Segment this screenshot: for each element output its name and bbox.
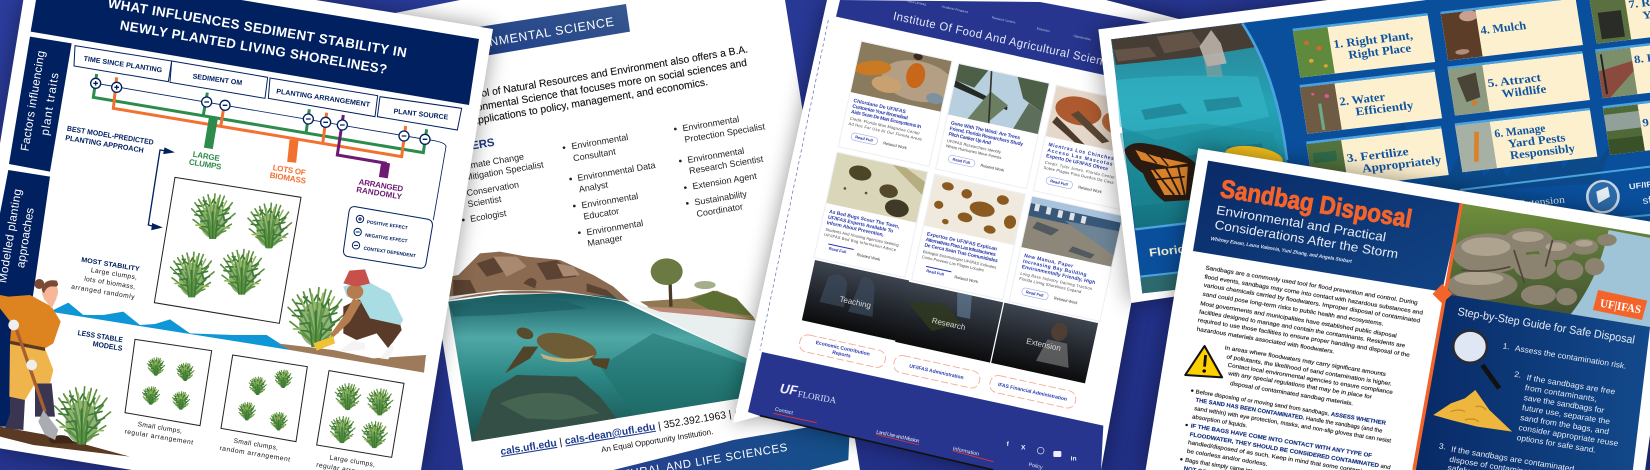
poster footer rules <box>1460 167 1650 220</box>
bullet list: be colorless and/or odorless. <box>1186 449 1268 468</box>
bullet list: absorption of liquids. <box>1192 414 1248 429</box>
news card 1: Chlordane De UF/IFAS <box>853 98 907 115</box>
news card 5: Related Work <box>954 274 979 284</box>
side panel: modelled planting approaches: approaches <box>14 207 37 269</box>
caption: small clumps random: random arrangement <box>219 445 291 464</box>
tile: research: Research <box>931 316 966 332</box>
news card 4: Students And Housing Agencies Seeking <box>825 227 899 247</box>
intro paragraph: in Environmental Science that focuses more on social sciences and <box>442 58 748 120</box>
news card 6: New Manua, Paper <box>1024 253 1074 270</box>
intro paragraph: applications to policy, management, and economics. <box>472 77 709 127</box>
news card 1 <box>836 40 960 168</box>
news card 5 <box>911 174 1026 300</box>
news card 1: Aids Scan De Man Ecosystems In <box>850 109 922 130</box>
careers list: Environmental <box>586 218 644 237</box>
steps list: sand from the bags, and <box>1520 413 1610 436</box>
footer band: college name <box>488 420 850 470</box>
news card 5: De Cerca Sean Tras Comunidades <box>924 242 999 264</box>
caption: large clumps regular: Large clumps, <box>329 454 376 469</box>
tile 6: manage yard pests responsibly: Responsibly <box>1509 142 1576 162</box>
sandbag header: Environmental and Practical <box>1215 202 1387 244</box>
intro text: various chemicals carried by floodwaters. Improper disposal of contaminated <box>1203 283 1421 324</box>
news card 3: Related Work <box>1078 184 1102 194</box>
button: IFAS financial administration: IFAS Financial Administration <box>997 382 1067 403</box>
website footer: X <box>1021 444 1026 451</box>
tile 9: protect the waterfront <box>1602 100 1650 155</box>
trait label: lots of biomass <box>269 163 307 186</box>
news card 6: Read Full <box>1025 289 1044 298</box>
steps list: consider appropriate reuse <box>1518 423 1619 448</box>
careers list: Protection Specialist <box>684 121 766 145</box>
intro text: required to use those facilities to ensure proper handling and disposal of the <box>1197 318 1410 359</box>
bullet list <box>1180 389 1392 470</box>
illustration: monarch butterfly <box>1124 143 1196 202</box>
website header: Research Centers <box>991 15 1016 25</box>
trait label: lots of biomass: BIOMASS <box>269 171 307 186</box>
tile 6: manage yard pests responsibly <box>1455 108 1597 172</box>
orange divider <box>1414 203 1461 470</box>
text: most stability: Large clumps, <box>90 267 138 282</box>
warning text <box>1224 345 1393 407</box>
news card 2: Where Hurricanes Move Forests <box>945 143 1002 160</box>
caption bar: Florida-Friendly <box>1135 208 1333 293</box>
title banner: NEWLY PLANTED LIVING SHORELINES? <box>119 17 388 77</box>
side panel: factors influencing plant traits <box>9 37 72 172</box>
factor labels <box>83 56 449 122</box>
seal <box>1587 181 1618 212</box>
tile: teaching <box>802 260 909 341</box>
careers list: Conservation <box>466 179 520 198</box>
news card 3: Read Full <box>1050 178 1068 187</box>
text: most stability <box>71 257 141 301</box>
careers list <box>459 114 766 248</box>
tile 4: mulch: 4. Mulch <box>1480 19 1527 37</box>
intro paragraph: The School of Natural Resources and Environment also offers a B.A. <box>437 44 749 107</box>
legend <box>344 207 432 268</box>
text: less stable models: MODELS <box>92 339 123 353</box>
tile 4: mulch <box>1440 0 1583 61</box>
careers list: Manager <box>587 233 623 248</box>
button: IFAS financial administration <box>988 374 1077 410</box>
tile 7: recycle yard waste <box>1589 0 1650 44</box>
tile 5: attract wildlife <box>1447 51 1590 116</box>
trait label: arranged randomly <box>356 177 404 202</box>
steps list: Assess the contamination risk. <box>1514 344 1627 371</box>
website footer: FLORIDA <box>797 389 838 405</box>
website footer: f <box>1007 441 1010 448</box>
careers list: Mitigation Specialist <box>464 159 545 182</box>
tile 5: attract wildlife: 5. Attract <box>1487 71 1543 90</box>
side panel: factors influencing plant traits: plant traits <box>38 72 62 136</box>
sandbag header: Considerations After the Storm <box>1213 217 1399 261</box>
news card 5: Read Full <box>926 268 945 277</box>
steps list: 1. <box>1502 342 1510 351</box>
tile 6: manage yard pests responsibly: 6. Manage <box>1493 122 1547 140</box>
logo: UF/IFAS <box>1593 290 1647 320</box>
intro text: facilities designed to manage and contain the contaminants. Residents are <box>1199 309 1406 349</box>
panel: step-by-step guide <box>1416 294 1650 470</box>
news card 5: Biologist Entomologist UF/IFAS Indicates <box>923 249 997 270</box>
careers heading: CAREERS <box>439 137 496 158</box>
news card 2: UF/IFAS Researchers Identify <box>947 138 1001 155</box>
news card 1: Related Work <box>883 140 907 150</box>
illustration: man planting shoreline grass <box>288 269 403 359</box>
text: most stability: MOST STABILITY <box>81 257 141 273</box>
section tab: environmental science: ENVIRONMENTAL SCIENCE <box>437 14 615 58</box>
news card 5: Como Prevenir Las Plagas Locales <box>921 254 984 273</box>
careers list: Sustainability <box>694 189 748 207</box>
tile 1: right plant right place: 1. Right Plant, <box>1332 29 1414 51</box>
photo: sea turtle and island <box>448 252 756 442</box>
careers list: Environmental <box>682 114 740 133</box>
factor labels: PLANTING ARRANGEMENT <box>276 88 371 109</box>
page: environmental science flyer <box>390 0 860 470</box>
news card 3: Experto De UF/IFAS Ofrece <box>1045 153 1109 172</box>
factor labels: PLANT SOURCE <box>393 108 449 122</box>
bullet list: Before disposing of or moving sand from sandbags, ASSESS WHETHER <box>1195 389 1387 427</box>
careers list: Analyst <box>578 179 609 194</box>
website footer: Contact <box>774 407 794 417</box>
news card 4: UF/IFAS Bed Bug Information Advice <box>824 232 897 252</box>
steps list: from contaminants, <box>1524 383 1598 404</box>
page: IFAS website screenshot <box>733 0 1190 470</box>
steps list: save the sandbags for <box>1523 393 1605 415</box>
news card 2: Related Work <box>980 163 1005 173</box>
news card 3: Acceso Las Mascotas <box>1047 148 1113 168</box>
news card 6: Related Work <box>1053 295 1078 305</box>
bullet list: IF THE BAGS HAVE COME INTO CONTACT WITH ANY TYPE OF <box>1190 423 1373 459</box>
caption: small clumps regular: regular arrangement <box>124 428 194 447</box>
tile 2: water efficiently: 2. Water <box>1338 90 1386 108</box>
caption: small clumps random: Small clumps, <box>233 438 279 452</box>
steps list: future use, separate the <box>1521 403 1611 426</box>
tile 2: water efficiently <box>1299 69 1442 134</box>
news card 4: UF/IFAS Experts Available To <box>827 215 894 235</box>
title banner <box>31 0 479 105</box>
legend: POSITIVE EFFECT <box>367 219 408 230</box>
careers list: Scientist <box>467 194 502 209</box>
caption bar: Florida-Friendly: Florida-Friendly Landscaping <box>1148 226 1333 259</box>
illustration: woman digging with shovel <box>0 279 130 457</box>
logo: UF/IFAS: UF|IFAS <box>1599 296 1643 316</box>
text: less stable models: LESS STABLE <box>77 328 124 344</box>
steps list: 2. <box>1514 370 1522 380</box>
panel: small clumps random <box>221 355 307 442</box>
caption: small clumps regular: Small clumps, <box>137 421 183 435</box>
news card 2: Gone With The Wind: Are Trees <box>950 120 1021 141</box>
tile: research <box>895 282 1003 363</box>
panel: most stable planting <box>154 177 301 323</box>
news card 1: Customize Your Bromeliad <box>852 104 908 121</box>
trait label: large clumps: LARGE <box>192 150 221 163</box>
factor labels: SEDIMENT OM <box>192 73 243 87</box>
news card 6: Florida Living Shorelines Expand <box>1019 276 1082 294</box>
tile: extension <box>991 303 1098 383</box>
arrow: best model bracket <box>148 148 173 229</box>
tile 1: right plant right place <box>1292 13 1435 78</box>
website header: Academic Programs <box>941 4 969 14</box>
news card 4: Inform About Prevention, <box>826 220 885 239</box>
careers list: Ecologist <box>469 208 507 224</box>
careers list: Environmental <box>687 146 745 165</box>
website footer: UF <box>779 381 799 398</box>
news card 3: Sobre Plagas Para Dueños De Casa <box>1043 165 1115 185</box>
tile 3: fertilize appropriately <box>1306 126 1449 181</box>
trait label: arranged randomly: RANDOMLY <box>356 185 403 202</box>
tile: teaching: Teaching <box>839 295 872 310</box>
poster footer contact <box>1628 178 1650 207</box>
icon: warning triangle <box>1185 346 1222 377</box>
page: sediment stability infographic <box>0 0 493 470</box>
silhouetted plants <box>1390 123 1614 193</box>
website header: Opportunities <box>1073 34 1092 42</box>
steps list: 3. <box>1438 442 1447 451</box>
careers list: Consultant <box>572 146 617 163</box>
intro text <box>1196 265 1423 359</box>
warning text: of pollutants, the likelihood of sand contamination is higher. <box>1226 354 1393 388</box>
news card 1: Ad Hoc For Use At Our Florida Areas <box>848 121 922 142</box>
steps list: If the sandbags are free <box>1526 373 1616 396</box>
factor header boxes <box>74 46 462 130</box>
blue poster field <box>1111 0 1650 293</box>
trait label: large clumps <box>188 150 223 172</box>
sandbag header: Whitney Eavan, Laura Valencia, Yuni Zhang, and Angela Stobart <box>1210 236 1353 265</box>
intro text: hazardous materials associated with floodwaters. <box>1196 327 1335 355</box>
trait label: large clumps: CLUMPS <box>188 157 223 172</box>
careers list: Environmental <box>571 132 629 151</box>
news card 1: Credit: Florida Man Magazine Center <box>849 116 921 136</box>
tile 5: attract wildlife: Wildlife <box>1501 82 1548 100</box>
warning text: Contact local environmental agencies to ensure compliance <box>1227 363 1393 396</box>
button: UF/IFAS administration <box>892 354 981 390</box>
best model heading: BEST MODEL-PREDICTED <box>66 124 154 147</box>
bullet list: THE SAND HAS BEEN CONTAMINATED. Handle the sandbags (and the <box>1195 398 1383 435</box>
intro text: Most governments and municipalities have established public disposal <box>1200 301 1397 339</box>
news card 6: Increasing Bay Building <box>1022 259 1087 278</box>
text: most stability: arranged randomly <box>71 284 136 301</box>
warning text: with any special regulations that may be in place for <box>1227 371 1372 401</box>
website footer: Information <box>952 446 980 458</box>
page: Florida-Friendly Landscaping poster <box>1098 0 1650 303</box>
effect markers <box>91 78 430 144</box>
news card 4: As Bed Bugs Scour The Town, <box>829 209 900 230</box>
icon: sand pile <box>1433 390 1512 432</box>
photo: freshwater spring <box>1111 23 1293 229</box>
page: sandbag disposal fact sheet <box>1146 148 1650 470</box>
text: less stable models <box>77 328 124 353</box>
news card 1: Read Full <box>855 134 873 143</box>
careers list: Environmental Data <box>577 160 656 183</box>
news card 4 <box>813 151 928 278</box>
intro text: sand could pose long-term risks to public health and ecosystems. <box>1202 292 1384 328</box>
sandbag header: Sandbag Disposal <box>1218 174 1414 233</box>
panel: small clumps regular <box>125 339 212 426</box>
text: most stability: lots of biomass, <box>84 276 136 291</box>
tile 3: fertilize appropriately: Appropriately <box>1361 153 1443 175</box>
news card 6 <box>1008 195 1123 322</box>
website dashed edge <box>760 20 828 350</box>
steps list <box>1438 342 1627 470</box>
news card 2: Pitch Canker Up And <box>948 131 991 147</box>
caption: large clumps regular <box>316 454 384 470</box>
website header <box>836 0 1190 94</box>
steps list: options for safe sand. <box>1516 433 1596 455</box>
careers list: Research Scientist <box>688 154 764 176</box>
legend: NEGATIVE EFFECT <box>365 232 408 244</box>
news card 4: Read Full <box>828 246 847 254</box>
news card 3: Credit: Tyler Jones, Florida Center <box>1044 160 1116 180</box>
news card 6: Environmentally Friendly, High <box>1021 264 1096 286</box>
news card 3: Mientras Los Chinches <box>1048 142 1115 162</box>
factor labels: TIME SINCE PLANTING <box>83 56 163 74</box>
website header: Institute Of Food And Agricultural Sciences <box>892 10 1123 72</box>
news card 5: Alternativas Para Las Infestaciones <box>925 237 997 258</box>
button: economic contribution reports <box>798 333 887 369</box>
website header: Extension <box>1036 26 1050 33</box>
news card 2: Friend, Florida Researchers Study <box>949 126 1024 148</box>
tile 8: reduce stormwater runoff <box>1595 43 1650 98</box>
trait pathway diagram <box>93 74 446 220</box>
trait label: arranged randomly: ARRANGED <box>358 177 404 194</box>
careers list: Coordinator <box>696 201 744 219</box>
panel: large clumps regular <box>317 371 404 457</box>
careers list: Educator <box>583 206 620 222</box>
side panel: factors influencing plant traits: Factors influencing <box>18 50 48 152</box>
intro text: flood events, sandbags may come into contact with hazardous substances and <box>1204 274 1423 316</box>
news card 4: Related Work <box>856 252 881 262</box>
tile 1: right plant right place: Right Place <box>1347 41 1412 62</box>
website footer <box>748 352 1103 470</box>
news card 2: Read Full <box>952 157 971 165</box>
news card 6: Long Bass Industry Gaining Traction <box>1020 271 1093 291</box>
website footer: in <box>1071 456 1077 463</box>
tile 3: fertilize appropriately: 3. Fertilize <box>1346 145 1410 165</box>
side panel: modelled planting approaches <box>0 170 50 427</box>
tile: extension: Extension <box>1025 337 1062 353</box>
button: economic contribution reports: Reports <box>832 350 851 360</box>
intro text: Sandbags are a commonly used tool for flood prevention and control. During <box>1205 265 1418 306</box>
news card 2 <box>935 63 1050 189</box>
button: economic contribution reports: Economic Contribution <box>815 340 870 358</box>
illustration: yellow flower <box>1223 142 1285 171</box>
tile 6: manage yard pests responsibly: Yard Pests <box>1507 131 1566 150</box>
warning text: disposal of contaminated sandbag materials. <box>1229 381 1354 407</box>
button: UF/IFAS administration: UF/IFAS Administration <box>909 364 964 381</box>
news card 3 <box>1032 84 1120 210</box>
careers list: Environmental <box>581 191 639 210</box>
careers list: Climate Change <box>459 151 525 172</box>
tile 2: water efficiently: Efficiently <box>1355 99 1415 118</box>
shoreline ground <box>277 343 426 373</box>
poster footer text: UF/IFAS Extension <box>1473 194 1566 214</box>
photo: sandbag wall <box>1446 203 1650 330</box>
careers list: Extension Agent <box>692 171 758 191</box>
guide heading: Step-by-Step Guide for Safe Disposal <box>1457 305 1636 347</box>
equal opportunity note: An Equal Opportunity Institution. <box>601 427 714 454</box>
legend: CONTEXT DEPENDENT <box>363 246 416 258</box>
website footer: Land Use and Mission <box>876 429 920 445</box>
contact line: cals.ufl.edu | cals-dean@ufl.edu | 352.392.1963 | @UF_CALS <box>500 400 792 458</box>
water wave <box>50 303 290 350</box>
news card 5: Expertos De UF/IFAS Explican <box>926 231 998 252</box>
bullet list: sand within) with eye protection, masks, and non-slip gloves that can resist <box>1194 406 1392 445</box>
sandbag header <box>1193 161 1461 292</box>
trait label: lots of biomass: LOTS OF <box>272 163 306 177</box>
best model heading: PLANTING APPROACH <box>65 133 144 155</box>
warning text: In areas where floodwaters may carry significant amounts <box>1224 345 1386 378</box>
icon: magnifying glass <box>1453 331 1499 388</box>
